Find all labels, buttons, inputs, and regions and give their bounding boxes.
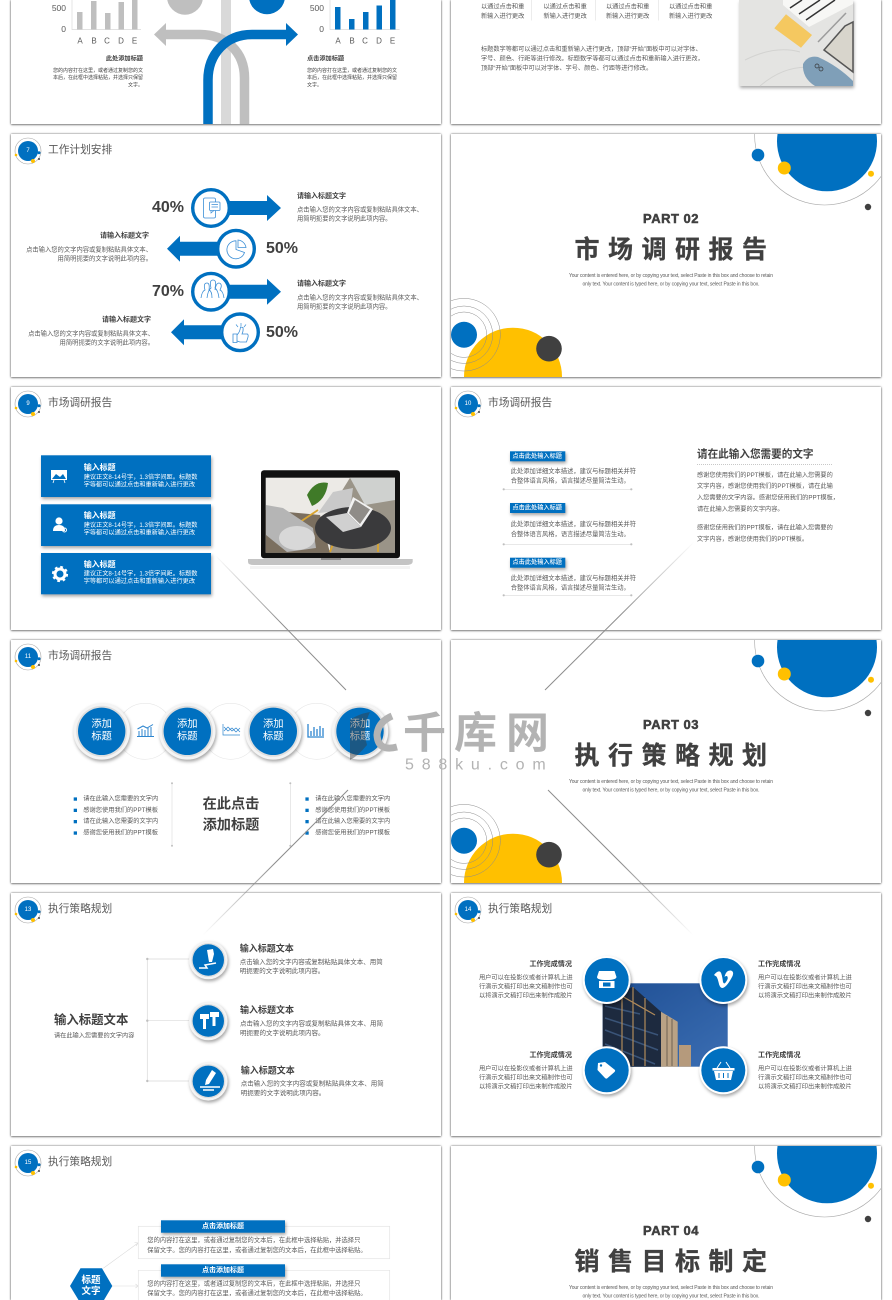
item 3: arrow and 70% <box>152 273 281 310</box>
card 3: 输入标题 <box>84 559 116 569</box>
text columns: 新输入进行更改 <box>481 12 524 20</box>
node 2: 添加 <box>177 717 198 730</box>
text: left chart caption <box>53 54 144 88</box>
hexagon: 标题 <box>81 1274 101 1286</box>
header: number badge and title <box>15 644 112 670</box>
text: top right: 行演示文稿打印出来文稿制作也可 <box>758 982 852 990</box>
bar chart: grey: D <box>118 36 124 46</box>
list item 1 <box>503 451 636 490</box>
header: number badge and title: 市场调研报告 <box>48 396 112 409</box>
text: item 1 <box>297 191 423 222</box>
panel: section PART 02 <box>451 134 881 377</box>
bullet list right: 请在此输入您需要的文字内 <box>315 794 390 802</box>
text: top right: 工作完成情况 <box>758 959 801 968</box>
text: item 4 <box>28 314 154 346</box>
card 3: 建议正文8-14号字，1.3倍字间距。标题数 <box>84 570 198 578</box>
decoration: top right circles <box>752 65 892 210</box>
text: top right <box>758 959 852 1000</box>
header: number badge and title: 市场调研报告 <box>488 396 552 409</box>
panel: slide 11 circle flow <box>11 640 441 883</box>
card 1 <box>41 455 211 497</box>
text: top right: 以将演示文稿打印出来制作成胶片 <box>758 990 852 1000</box>
dividers with end dots <box>171 782 291 847</box>
item 4: arrow and 50% <box>171 314 298 351</box>
text columns: 新输入进行更改 <box>669 12 712 20</box>
text: left chart caption: 您的内容打在这里，或者通过复制您的文 <box>53 67 143 74</box>
icon: store <box>583 956 631 1004</box>
text: item 2: 明扼要的文字说明此项内容。 <box>240 1028 324 1037</box>
text: bottom right: 工作完成情况 <box>758 1050 801 1059</box>
text: item 2: 用简明扼要的文字说明此项内容。 <box>58 254 152 262</box>
header: number badge and title: 15 <box>25 1160 32 1166</box>
bar chart: grey: 500 <box>52 3 66 13</box>
node 4 <box>332 703 388 760</box>
laptop with photo <box>248 470 413 569</box>
text: english description: only text. Your content is typed here, or by copying your text, select Paste in this box. <box>582 1294 760 1300</box>
panel: slide 13 strategy tree <box>11 893 441 1136</box>
text: bottom left <box>479 1050 573 1090</box>
text: item 4: 点击输入您的文字内容或复制粘贴具体文本、 <box>28 328 154 338</box>
box 1: 保留文字。您的内容打在这里，或者通过复制您的文本后，在此框中选择粘贴。 <box>147 1245 367 1254</box>
card 2: 建议正文8-14号字，1.3倍字间距。标题数 <box>84 521 198 529</box>
item 1: arrow and 40% <box>152 190 281 226</box>
center heading: 添加标题 <box>203 817 259 833</box>
text: right column: 文字内容，感谢您使用我们的PPT模板，请在此输 <box>697 482 834 490</box>
text columns: 以通过点击和重 <box>669 2 712 10</box>
watermark: site name: 库 <box>454 710 497 758</box>
list item 3 <box>503 558 636 596</box>
list item 1: 合整体语言风格，语言描述尽量简洁生动。 <box>511 476 630 484</box>
bullet list left: 感谢您使用我们的PPT模板 <box>83 828 159 836</box>
text: english description: only text. Your content is typed here, or by copying your text, select Paste in this box. <box>582 282 760 288</box>
bar chart: blue: A <box>335 36 341 46</box>
bullet list right <box>305 794 391 836</box>
text: english description: Your content is entered here, or by copying your text, select Paste in this box and choose to retain <box>569 1285 773 1291</box>
bar chart: blue: B <box>349 36 355 46</box>
header: number badge and title <box>455 391 552 417</box>
list item 1: 此处添加详细文本描述，建议与标题相关并符 <box>511 466 636 475</box>
decoration: bottom left circles <box>428 804 562 932</box>
text: item 2 <box>26 230 152 262</box>
decoration: top right circles <box>752 571 892 716</box>
connectors from hexagon <box>103 1242 138 1288</box>
header: number badge and title <box>15 391 112 417</box>
text: item 3: 用简明扼要的文字说明此项内容。 <box>297 302 391 310</box>
icon: price tag <box>583 1046 631 1094</box>
card 2 <box>41 504 211 546</box>
text: top right: 用户可以在投影仪或者计算机上进 <box>758 972 852 982</box>
text: item 3: 点击输入您的文字内容或复制粘贴具体文本、用简 <box>241 1078 384 1088</box>
text: item 2: 点击输入您的文字内容或复制粘贴具体文本、 <box>26 244 152 254</box>
decoration: bottom left circles <box>428 298 562 426</box>
box 2: 您的内容打在这里，或者通过复制您的文本后，在此框中选择粘贴，并选择只 <box>147 1278 360 1288</box>
header: number badge and title: 执行策略规划 <box>488 902 552 915</box>
panel: slide 9 market research list <box>11 387 441 630</box>
icon: pencil <box>189 1062 228 1101</box>
text: english description <box>569 779 773 794</box>
icon: shopping basket <box>699 1046 747 1094</box>
center heading <box>203 795 259 833</box>
text: right chart caption <box>307 54 397 88</box>
text: english description <box>569 273 773 288</box>
node 3: 添加 <box>263 717 284 730</box>
text: item 3: 输入标题文本 <box>241 1064 295 1075</box>
text: item 4: 用简明扼要的文字说明此项内容。 <box>60 338 154 346</box>
panel: slide 6 text and photo <box>451 0 881 124</box>
card 2: 字等都可以通过点击和重新输入进行更改 <box>84 528 195 536</box>
item 1: arrow and 40%: 40% <box>152 199 184 216</box>
text: item 1: 输入标题文本 <box>240 942 294 953</box>
text: top left: 工作完成情况 <box>529 959 572 968</box>
text: left chart caption: 文字。 <box>128 82 143 88</box>
text: item 1: 明扼要的文字说明此项内容。 <box>240 966 324 975</box>
panel: slide 5 chart comparison <box>11 0 441 124</box>
header: number badge and title <box>455 897 552 923</box>
header: number badge and title: 执行策略规划 <box>48 1155 112 1168</box>
item 2: arrow and 50%: 50% <box>266 240 298 257</box>
bullet list right: 感谢您使用我们的PPT模板 <box>315 828 391 836</box>
node 4: 标题 <box>350 730 370 742</box>
node 1 <box>73 703 130 760</box>
text: item 3 <box>297 278 423 310</box>
box 1 <box>138 1220 390 1259</box>
text: left chart caption: 此处添加标题 <box>106 54 144 62</box>
text: right column: 请在此输入您需要的文字 <box>697 448 814 461</box>
panel: slide 7 work plan <box>11 134 441 377</box>
node 3: 标题 <box>263 730 284 742</box>
text columns: 以通过点击和重 <box>481 2 524 10</box>
item 3: arrow and 70%: 70% <box>152 283 184 300</box>
center heading: 在此点击 <box>203 795 259 812</box>
card 2: 输入标题 <box>84 510 116 520</box>
text columns: 以通过点击和重 <box>544 2 587 10</box>
list item 2: 此处添加详细文本描述，建议与标题相关并符 <box>511 519 636 528</box>
box 2: 保留文字。您的内容打在这里，或者通过复制您的文本后，在此框中选择粘贴。 <box>147 1288 367 1297</box>
heading: part number: PART 03 <box>643 717 699 732</box>
heading: part number: PART 04 <box>643 1223 699 1238</box>
icon: paint brushes <box>189 1002 228 1040</box>
bar chart: blue: E <box>390 36 395 46</box>
box 2 <box>138 1264 390 1300</box>
text: item 1: 点击输入您的文字内容或复制粘贴具体文本、 <box>297 204 423 214</box>
bullet list right: 感谢您使用我们的PPT模板 <box>315 805 391 814</box>
node 1: 标题 <box>91 730 112 742</box>
item 2: arrow and 50% <box>167 230 298 267</box>
list item 3: 此处添加详细文本描述，建议与标题相关并符 <box>511 573 636 582</box>
bullet list right: 请在此输入您需要的文字内 <box>315 816 390 825</box>
icon: vimeo <box>699 956 747 1004</box>
text: bottom left: 行演示文稿打印出来文稿制作也可 <box>479 1072 573 1082</box>
text: left chart caption: 本后，在此框中选择粘贴，并选择只保留 <box>53 74 143 81</box>
panel: section PART 04 <box>451 1146 881 1300</box>
watermark: site name <box>403 710 553 774</box>
text: right column: 入您需要的文字内容。感谢您使用我们的PPT模板， <box>697 494 839 502</box>
header: number badge and title <box>15 1150 112 1176</box>
text: item 2: 请输入标题文字 <box>100 230 149 240</box>
text: bottom left: 以将演示文稿打印出来制作成胶片 <box>479 1082 573 1090</box>
text: right chart caption: 点击添加标题 <box>307 54 345 62</box>
card 3: 字等都可以通过点击和重新输入进行更改 <box>84 577 195 585</box>
list item 2 <box>503 503 636 545</box>
text: right chart caption: 您的内容打在这里，或者通过复制您的文 <box>307 67 397 74</box>
header: number badge and title: 11 <box>25 654 32 660</box>
text: bottom right: 用户可以在投影仪或者计算机上进 <box>758 1064 852 1072</box>
text columns: 以通过点击和重 <box>606 2 649 10</box>
item 4: arrow and 50%: 50% <box>266 324 298 341</box>
node 2: 标题 <box>177 730 198 742</box>
text: top left: 以将演示文稿打印出来制作成胶片 <box>479 990 573 1000</box>
text paragraph: 字号、颜色、行距等进行修改。标题数字等都可以通过点击和重新输入进行更改， <box>481 54 704 62</box>
node 1: 添加 <box>91 717 112 730</box>
node 3 <box>245 703 302 760</box>
text: right column: 感谢您使用我们的PPT模板，请在此输入您需要的 <box>697 471 833 479</box>
header: number badge and title <box>15 138 112 164</box>
panel: section PART 03 <box>451 640 881 883</box>
heading: part number: PART 02 <box>643 211 699 226</box>
watermark: site name: 588ku.com <box>405 756 553 774</box>
left heading: 请在此输入您需要的文字内容 <box>54 1032 134 1040</box>
text columns: 新输入进行更改 <box>606 12 649 20</box>
bar chart: grey: A <box>77 36 83 46</box>
header: number badge and title: 7 <box>26 148 30 154</box>
text: top left <box>479 959 573 1000</box>
bar chart: grey: E <box>132 36 137 46</box>
text: top left: 用户可以在投影仪或者计算机上进 <box>479 972 573 982</box>
bullet list left: 感谢您使用我们的PPT模板 <box>83 805 159 814</box>
text columns <box>481 0 712 20</box>
header: number badge and title: 13 <box>25 907 32 913</box>
text: bottom right <box>758 1050 852 1090</box>
text: item 4: 请输入标题文字 <box>102 314 151 324</box>
box 1: 点击添加标题 <box>202 1221 244 1230</box>
card 3 <box>41 553 211 594</box>
left heading: 输入标题文本 <box>54 1012 129 1027</box>
watermark: logo mark <box>350 712 397 760</box>
card 1: 输入标题 <box>84 462 116 472</box>
left heading <box>54 1012 134 1040</box>
text: item 3: 点击输入您的文字内容或复制粘贴具体文本、 <box>297 292 423 302</box>
header: number badge and title <box>15 897 112 923</box>
watermark: site name: 网 <box>506 710 549 758</box>
text columns: 新输入进行更改 <box>544 12 587 20</box>
photo: building against blue sky <box>603 983 728 1067</box>
box 1: 您的内容打在这里，或者通过复制您的文本后，在此框中选择粘贴，并选择只 <box>147 1235 360 1244</box>
text: right column <box>697 448 839 543</box>
text: bottom left: 用户可以在投影仪或者计算机上进 <box>479 1064 573 1072</box>
header: number badge and title: 14 <box>465 907 472 913</box>
bar chart: grey <box>52 0 141 46</box>
text: item 3: 明扼要的文字说明此项内容。 <box>241 1088 325 1097</box>
text: bottom right: 行演示文稿打印出来文稿制作也可 <box>758 1072 852 1082</box>
bar chart: blue: 0 <box>319 24 324 34</box>
list item 1: 点击此处输入标题 <box>512 452 562 460</box>
text: item 2: 点击输入您的文字内容或复制粘贴具体文本、用简 <box>240 1018 384 1028</box>
list item 3: 点击此处输入标题 <box>512 558 562 566</box>
card 1: 建议正文8-14号字，1.3倍字间距。标题数 <box>84 473 198 481</box>
text: right column: 请在此输入您需要的文字内容。 <box>697 505 784 513</box>
text paragraph: 标题数字等都可以通过点击和重新输入进行更改，顶部“开始”面板中可以对字体、 <box>481 45 702 53</box>
list item 2: 合整体语言风格，语言描述尽量简洁生动。 <box>511 529 630 538</box>
hexagon: 文字 <box>81 1285 101 1297</box>
header: number badge and title: 工作计划安排 <box>48 143 112 156</box>
bullet list left <box>74 794 159 836</box>
text paragraph <box>481 45 704 72</box>
text: right chart caption: 本后，在此框中选择粘贴，并选择只保留 <box>307 74 397 81</box>
header: number badge and title: 执行策略规划 <box>48 902 112 915</box>
text: bottom right: 以将演示文稿打印出来制作成胶片 <box>758 1082 852 1090</box>
list item 3: 合整体语言风格，语言描述尽量简洁生动。 <box>511 582 630 592</box>
node 2 <box>159 703 216 760</box>
text: english description: Your content is entered here, or by copying your text, select Paste in this box and choose to retain <box>569 779 773 785</box>
panel: slide 15 strategy boxes <box>11 1146 441 1300</box>
node 4: 添加 <box>350 717 370 730</box>
center diverging arrows graphic <box>154 0 298 124</box>
panel: slide 14 photo with icons <box>451 893 881 1136</box>
text: item 1: 请输入标题文字 <box>297 191 346 200</box>
bar chart: blue: C <box>362 36 368 46</box>
panel: slide 10 market research text <box>451 387 881 630</box>
text: bottom left: 工作完成情况 <box>529 1050 572 1059</box>
header: number badge and title: 9 <box>26 401 30 407</box>
tree connector <box>146 958 191 1082</box>
text: right column: 文字内容，感谢您使用我们的PPT模板。 <box>697 535 808 543</box>
hexagon <box>70 1268 112 1300</box>
text: right chart caption: 文字。 <box>307 82 322 88</box>
bullet list left: 请在此输入您需要的文字内 <box>83 816 158 825</box>
bar chart: grey: B <box>91 36 97 46</box>
text paragraph: 顶部“开始”面板中可以对字体、字号、颜色、行距等进行修改。 <box>481 64 652 72</box>
bar chart: blue: D <box>376 36 382 46</box>
header: number badge and title: 10 <box>465 401 472 407</box>
linking rings and chart icons <box>117 703 345 759</box>
card 1: 字等都可以通过点击和重新输入进行更改 <box>84 480 195 488</box>
text: item 3: 请输入标题文字 <box>297 278 346 288</box>
list item 2: 点击此处输入标题 <box>512 504 562 512</box>
text: item 2 <box>240 1004 384 1037</box>
decoration: top right circles <box>752 1077 892 1222</box>
bar chart: blue: 500 <box>310 3 324 13</box>
text: english description: Your content is entered here, or by copying your text, select Paste in this box and choose to retain <box>569 273 773 279</box>
box 2: 点击添加标题 <box>202 1265 244 1274</box>
header: number badge and title: 市场调研报告 <box>48 649 112 662</box>
watermark: diagonal lines <box>203 542 694 935</box>
text: item 1: 点击输入您的文字内容或复制粘贴具体文本、用简 <box>240 957 383 966</box>
bar chart: grey: 0 <box>61 24 66 34</box>
text: english description <box>569 1285 773 1300</box>
bar chart: blue <box>310 0 400 46</box>
text: top left: 行演示文稿打印出来文稿制作也可 <box>479 982 573 990</box>
heading: section title: 执行策略规划 <box>574 742 776 770</box>
heading: section title: 市场调研报告 <box>574 236 776 264</box>
watermark: site name: 千 <box>403 710 446 758</box>
bar chart: grey: C <box>104 36 110 46</box>
text: item 2: 输入标题文本 <box>240 1004 294 1015</box>
text: item 1: 用简明扼要的文字说明此项内容。 <box>297 214 391 222</box>
text: english description: only text. Your content is typed here, or by copying your text, select Paste in this box. <box>582 788 760 794</box>
photo: desk flat lay <box>739 0 853 86</box>
text: right column: 感谢您使用我们的PPT模板，请在此输入您需要的 <box>697 524 833 532</box>
bullet list left: 请在此输入您需要的文字内 <box>83 794 158 802</box>
heading: section title: 销售目标制定 <box>574 1248 776 1276</box>
text: item 1 <box>240 942 383 975</box>
text: item 3 <box>241 1064 384 1097</box>
icon: pen tool <box>189 941 228 979</box>
